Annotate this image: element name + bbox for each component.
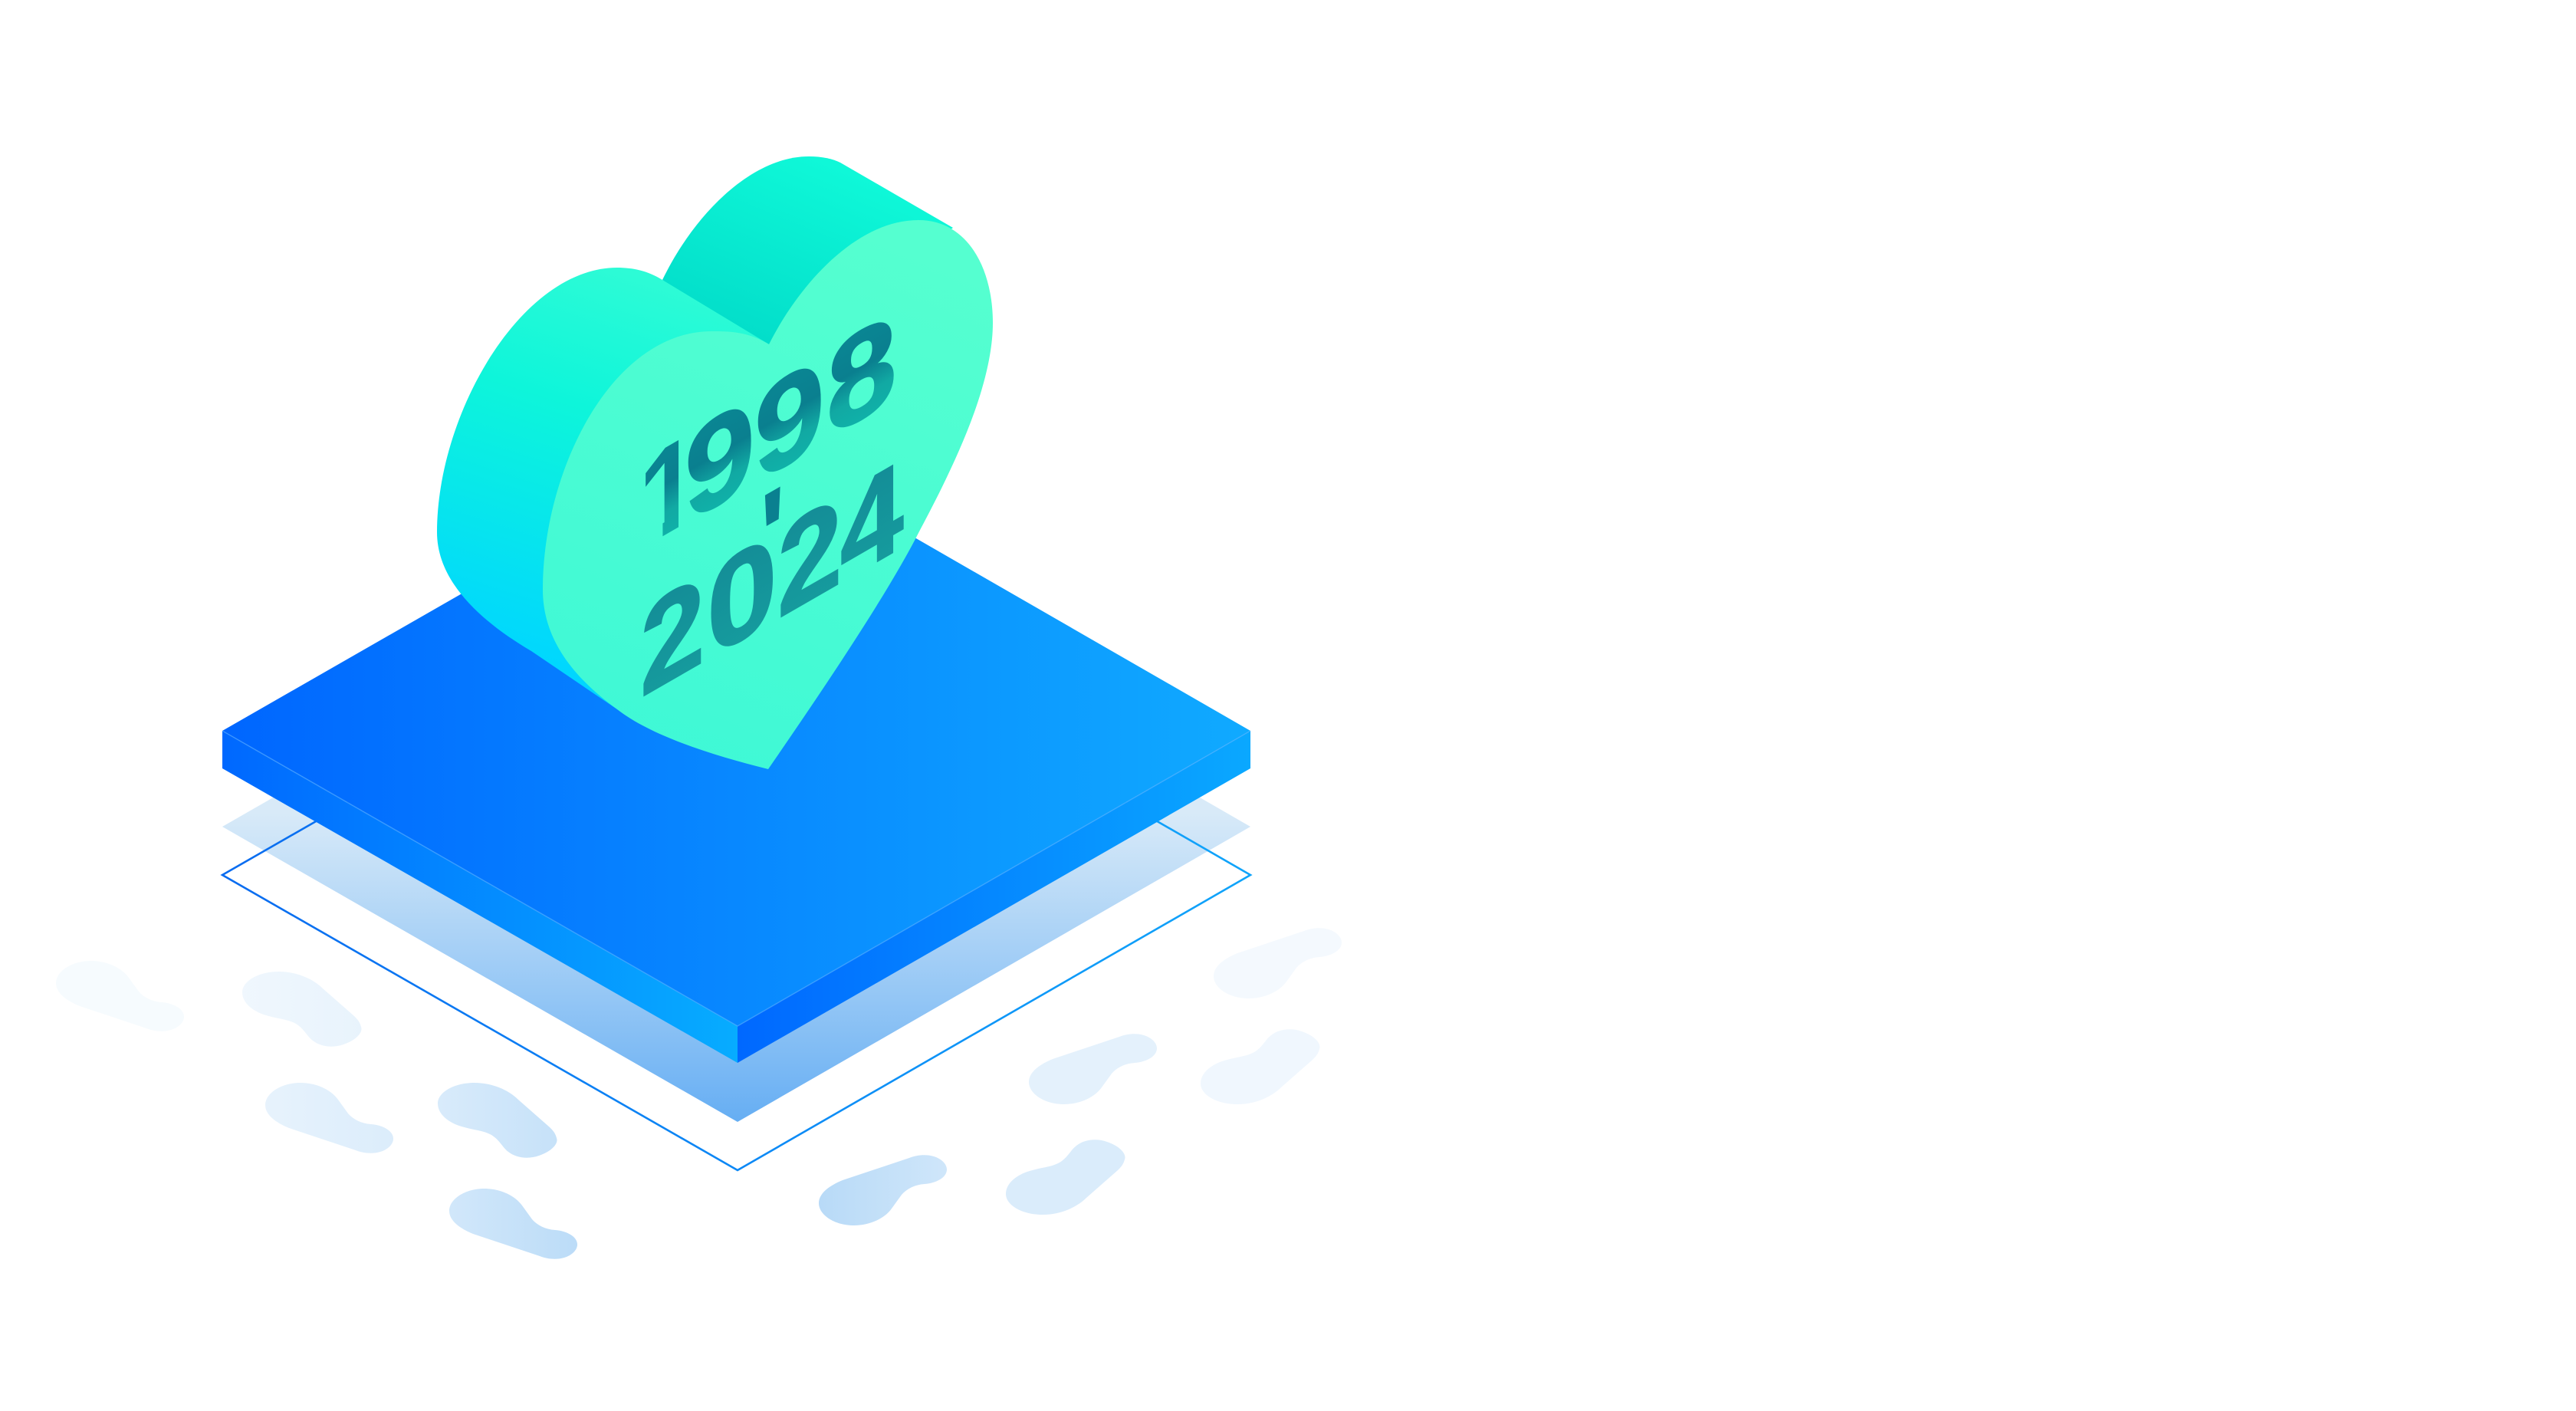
heart: left lobe side [437,268,769,736]
heart: apostrophe separator: ' [759,456,786,613]
heart: years text 1998: 1 [638,400,702,577]
platform shadow [222,531,1250,1122]
footprints: left trail [56,961,577,1259]
illustration: isometric heart on platform [56,156,1342,1259]
platform right side [738,731,1250,1063]
heart: front face [543,220,993,769]
heart: back right lobe side [662,156,953,360]
heart: years text 1998 [646,322,894,537]
heart: years text 1998: 9 [685,369,755,551]
platform top surface [222,436,1250,1026]
platform [222,436,1250,1063]
heart: years text 2024: 2 [640,547,705,725]
heart: years text 2024: 2 [777,468,842,646]
wireframe outline under platform [222,580,1250,1170]
heart [437,156,993,769]
heart: years text 1998: 8 [826,284,897,465]
heart: years text 1998: 9 [754,328,825,510]
platform left side [222,731,738,1063]
heart: years text 2024: 0 [707,505,777,686]
footprints: right trail [819,928,1342,1225]
heart: years text 2024 [640,432,904,725]
heart: years text 2024: 4 [840,432,904,610]
